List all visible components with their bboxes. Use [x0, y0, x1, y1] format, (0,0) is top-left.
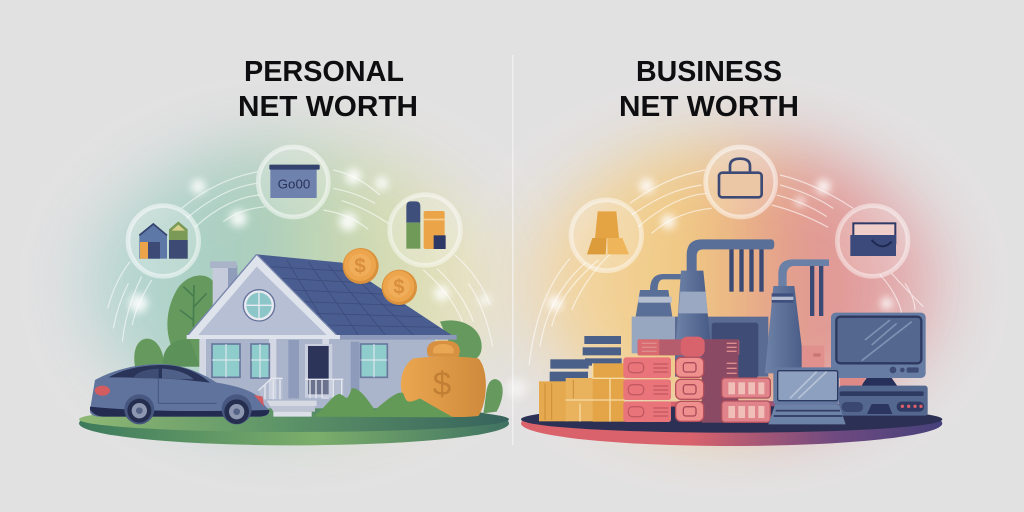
centre divider [512, 55, 514, 445]
title: business second line: NET WORTH [619, 91, 799, 123]
factory [632, 239, 829, 378]
car [90, 364, 269, 424]
arcs [529, 170, 923, 365]
stacks: dark binders [550, 336, 622, 382]
icon: coin one: $ [354, 255, 366, 278]
icon: gold bars bubble [571, 200, 642, 271]
shrubs [313, 388, 453, 417]
laptop [768, 367, 846, 424]
sparkles [548, 179, 893, 311]
trees [134, 275, 503, 413]
house [187, 254, 457, 417]
monitor [831, 313, 928, 416]
icon: containers bubble [390, 195, 460, 265]
icon: coin one [343, 248, 379, 284]
icon: coin two: $ [393, 277, 405, 299]
title: business: BUSINESS [636, 56, 782, 88]
ground disc [79, 401, 509, 445]
icon: money bag: $ [433, 366, 451, 403]
icon: buildings bubble [128, 206, 199, 276]
icon: sign bubble: Go00 [278, 178, 310, 192]
icon: coin two [382, 270, 417, 305]
servers: red front [623, 337, 770, 422]
colour glow: business [530, 145, 940, 425]
boxes: gold [539, 363, 624, 422]
arcs and sparkles [108, 170, 493, 347]
sparkles [129, 169, 490, 313]
title: personal second line: NET WORTH [238, 91, 418, 123]
title: personal: PERSONAL [244, 56, 404, 88]
icon: money bag [401, 341, 486, 417]
ground disc [521, 401, 942, 446]
icon: wallet bubble [837, 206, 908, 276]
icon: sign bubble [258, 147, 328, 217]
panel: personal scene [79, 147, 509, 445]
colour glow: personal [87, 145, 497, 425]
panel: business scene [507, 147, 942, 446]
servers: red back [638, 339, 739, 423]
soft glow at platform left [507, 378, 527, 398]
icon: lock bubble [706, 147, 776, 217]
